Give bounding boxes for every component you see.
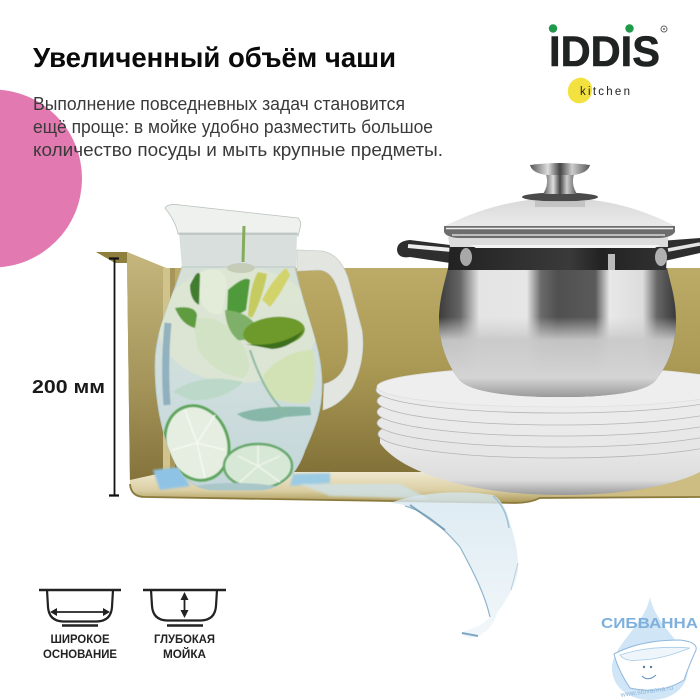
label: wide base: ШИРОКОЕ — [50, 632, 110, 646]
description text: Выполнение повседневных задач становится — [33, 94, 405, 114]
label: wide base: ОСНОВАНИЕ — [43, 647, 117, 661]
logo: IDDIS kitchen: IDDIS — [549, 28, 660, 76]
sink — [96, 252, 700, 503]
jug contents — [155, 267, 318, 495]
label: deep sink — [154, 632, 215, 661]
saucepan — [397, 163, 700, 397]
water on sink floor — [153, 467, 430, 499]
pot band — [448, 240, 668, 270]
mint stem — [243, 226, 244, 262]
jug rim — [165, 204, 301, 236]
watermark: Сибванна logo — [601, 597, 698, 700]
label: deep sink: МОЙКА — [163, 646, 206, 661]
label: deep sink: ГЛУБОКАЯ — [154, 632, 215, 646]
jug handle — [297, 250, 363, 410]
icon: deep sink — [143, 590, 226, 626]
plates stack — [376, 367, 700, 495]
logo: IDDIS kitchen: kitchen — [580, 86, 630, 98]
jug body — [155, 267, 322, 490]
left handle — [397, 240, 470, 266]
description text — [33, 94, 443, 160]
watermark: Сибванна logo: СИБВАННА — [601, 615, 698, 632]
glass jug — [155, 204, 363, 495]
watermark: Сибванна logo: www.sibvanna.ru — [619, 685, 674, 699]
pale leaves — [199, 270, 214, 274]
description text: количество посуды и мыть крупные предметы. — [33, 140, 443, 160]
logo: IDDIS kitchen — [549, 24, 667, 107]
jug neck — [179, 232, 297, 268]
title: Увеличенный объём чаши — [33, 42, 396, 73]
pink circle — [0, 90, 82, 268]
water stream — [390, 492, 518, 638]
lime slice small — [224, 444, 292, 488]
icon: wide base sink — [39, 590, 121, 626]
lid knob — [522, 192, 598, 202]
stem and blue reflection — [166, 323, 168, 405]
lid — [445, 198, 675, 232]
mint leaves — [175, 307, 197, 328]
description text: ещё проще: в мойке удобно разместить большое — [33, 117, 433, 137]
lime slice large — [164, 404, 232, 482]
right handle — [660, 238, 700, 262]
height dimension line — [109, 258, 119, 496]
height label: 200 мм — [32, 376, 105, 397]
label: wide base — [43, 632, 117, 661]
pot body — [439, 268, 676, 397]
